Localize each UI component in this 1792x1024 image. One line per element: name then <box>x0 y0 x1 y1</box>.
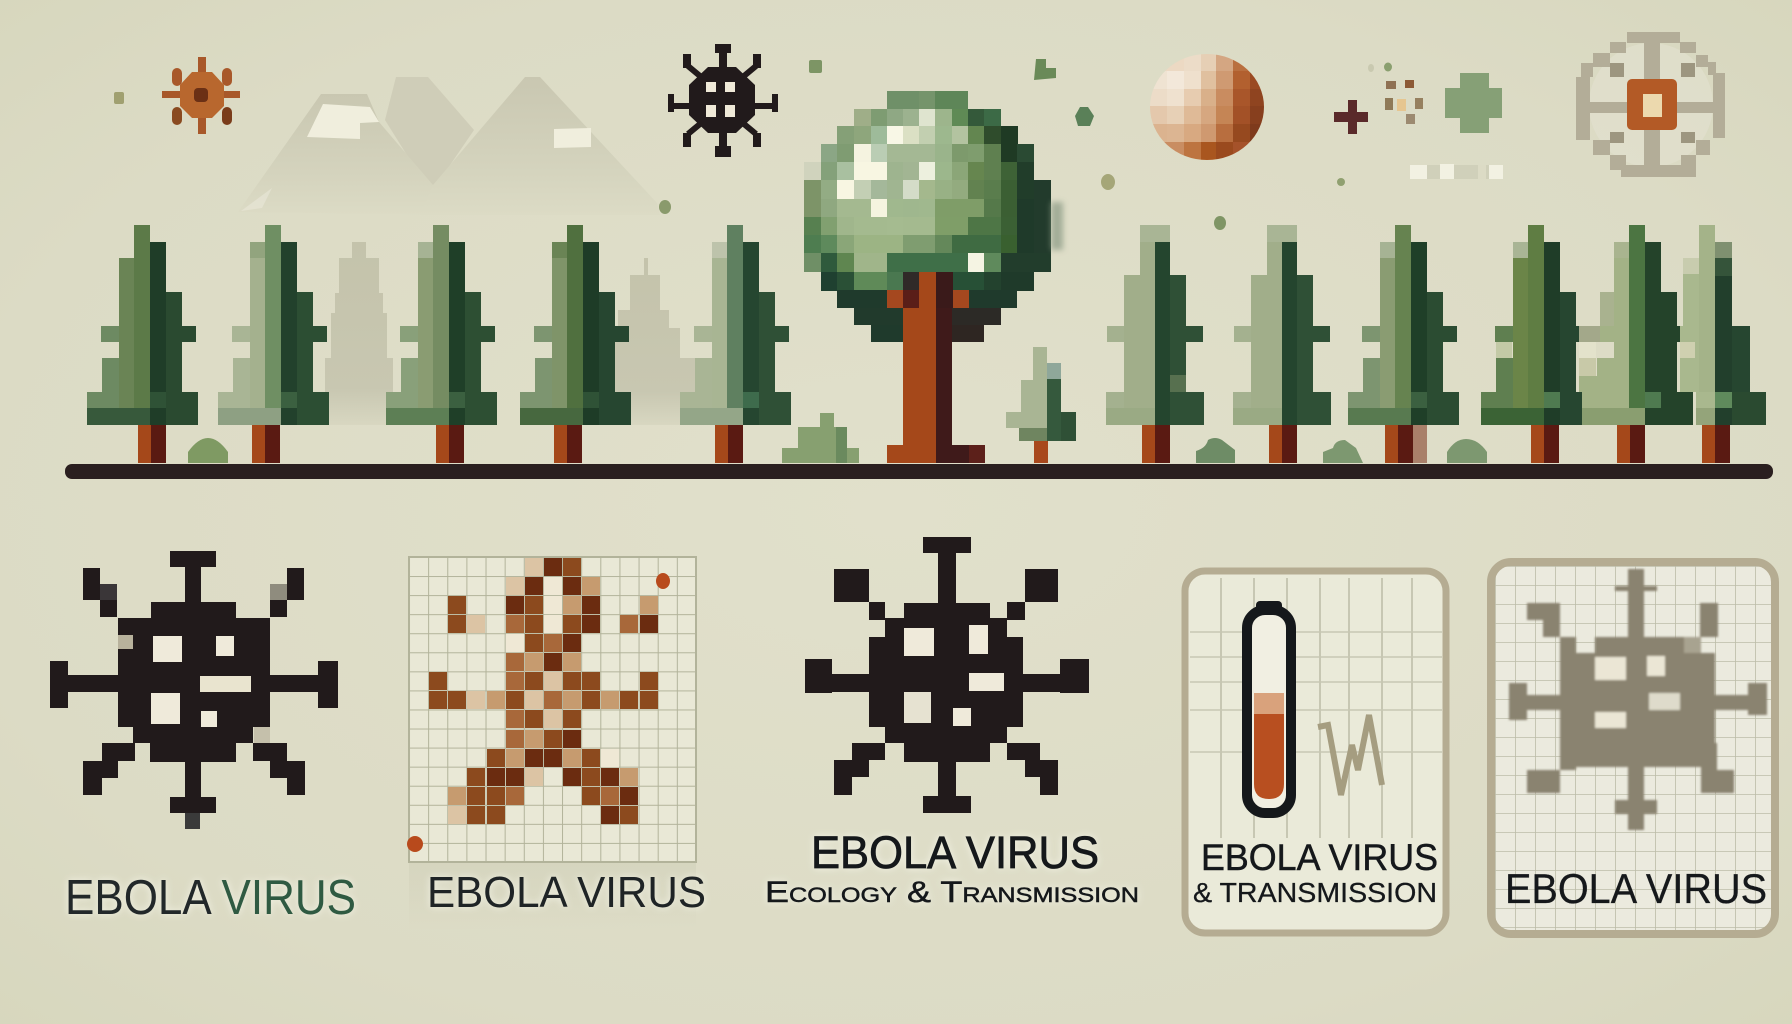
icon: small green dot <box>1337 178 1345 186</box>
icon: floating green dot <box>809 60 822 73</box>
grid lines <box>1190 578 1442 838</box>
icon: floating green speck 2 <box>1075 107 1094 126</box>
tree 1 <box>87 225 198 463</box>
forest row <box>87 225 1766 463</box>
icon: pale dashes <box>1410 164 1503 179</box>
subheading: ecology and transmission: Ecology & Transmission <box>765 876 1139 909</box>
icon: floating green oval <box>1214 216 1226 230</box>
label: transmission: & TRANSMISSION <box>1193 877 1437 908</box>
label: Ebola virus card: EBOLA VIRUS <box>1201 837 1438 878</box>
icon: right snow cap <box>554 128 591 148</box>
bush 2 <box>782 413 859 463</box>
icon: left snow cap <box>307 104 379 139</box>
trunk <box>887 272 985 463</box>
icon: black virus centre <box>805 537 1089 813</box>
icon: black virus left <box>50 551 338 829</box>
icon: orange virus <box>162 57 240 134</box>
panel: faded virus card <box>1491 562 1775 934</box>
crown <box>804 91 1051 342</box>
label: Ebola virus grid: EBOLA VIRUS <box>427 868 706 917</box>
icon: dark red cross <box>1334 100 1368 134</box>
ground line <box>65 464 1773 479</box>
icon: scattered particles <box>1368 62 1423 124</box>
small tree <box>1006 347 1076 463</box>
bush 5 <box>1447 439 1487 463</box>
tree 2 <box>218 225 329 463</box>
heading: Ebola virus centre: EBOLA VIRUS <box>811 827 1099 878</box>
icon: mountain dot <box>659 200 671 214</box>
tree 9 <box>1481 225 1592 463</box>
icon: faded virus <box>1509 569 1767 830</box>
tree 3 <box>386 225 497 463</box>
icon: ring virus <box>1576 32 1725 177</box>
icon: green plus blob <box>1445 73 1502 133</box>
ghost tree 1 <box>316 242 402 425</box>
icon: pixel sphere <box>1150 53 1265 160</box>
ghost tree 2 <box>600 258 695 425</box>
tree 5 <box>680 225 791 463</box>
icon: small black virus <box>668 44 778 157</box>
icon: red dot bottom <box>407 836 423 852</box>
tree 11 <box>1680 225 1766 463</box>
bush 3 <box>1196 438 1235 463</box>
bush 1 <box>188 438 228 463</box>
icon: floating olive speck <box>1101 174 1115 190</box>
icon: red dot top <box>656 573 670 589</box>
icon: small olive dot <box>114 92 124 104</box>
tree 6 <box>1106 225 1204 463</box>
panel: test tube card <box>1185 571 1446 933</box>
icon: floating green speck <box>1034 59 1056 80</box>
icon: pulse line <box>1318 715 1382 795</box>
tree 4 <box>520 225 631 463</box>
mountains <box>238 77 660 215</box>
large central tree <box>804 91 1063 463</box>
panel: pixel figure grid <box>407 557 696 930</box>
pixel figure <box>429 558 658 824</box>
bush 4 <box>1323 440 1363 463</box>
icon: test tube <box>1247 601 1291 813</box>
tree 8 <box>1348 225 1459 463</box>
label: Ebola virus left: EBOLA VIRUS <box>65 871 356 925</box>
side smudge <box>1051 202 1063 250</box>
tree 10 <box>1579 225 1693 463</box>
tree 7 <box>1233 225 1331 463</box>
label: Ebola virus faded card: EBOLA VIRUS <box>1505 865 1767 912</box>
